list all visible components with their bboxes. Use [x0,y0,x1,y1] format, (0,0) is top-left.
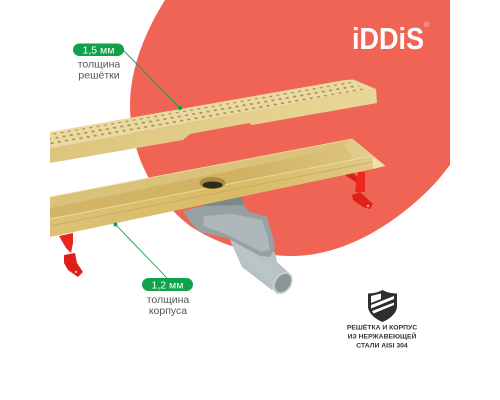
pill value: 1,2 мм [152,280,183,292]
drain grate [50,80,377,163]
caption: толщина [78,58,120,70]
pipe mouth interior [272,271,294,295]
drain body tray [50,139,385,237]
red foot left [59,233,83,277]
tray interior [50,139,372,219]
grey siphon [183,196,297,298]
pipe mouth [268,268,297,298]
logo: iDDiS: iDDiS [352,21,424,56]
pill value: 1,5 мм [83,44,114,56]
callout: 1,2 мм [114,222,193,317]
siphon flange inner [203,214,270,252]
tray front lip [50,156,372,219]
leader dot [178,106,182,110]
icon: shield [368,290,397,322]
steel note: СТАЛИ AISI 304 [356,342,408,350]
pill [73,44,124,56]
siphon neck [200,196,244,212]
siphon flange [183,205,275,257]
caption: корпуса [149,305,187,317]
tray inner right wall [344,139,372,160]
steel note: РЕШЁТКА И КОРПУС [347,324,417,332]
tray front shadow [50,162,372,226]
grate front face [50,89,377,163]
tray top edge [50,139,385,197]
steel note: ИЗ НЕРЖАВЕЮЩЕЙ [348,332,416,340]
siphon outlet pipe [230,240,289,290]
drain hole [200,177,226,189]
grate top face [50,80,376,148]
caption: решётки [78,70,120,82]
grate perforation [50,82,367,146]
leader dot [114,222,118,226]
callout: 1,5 мм [73,44,182,110]
background coral shape [130,0,450,256]
pill [142,278,193,291]
leader line [116,224,167,278]
leader line [123,50,180,108]
red foot right [345,172,373,209]
tray back wall [50,139,352,208]
logo: iDDiS: ® [424,21,430,29]
caption: толщина [147,294,189,306]
tray corner flange [372,156,385,169]
tray front wall [50,156,373,237]
